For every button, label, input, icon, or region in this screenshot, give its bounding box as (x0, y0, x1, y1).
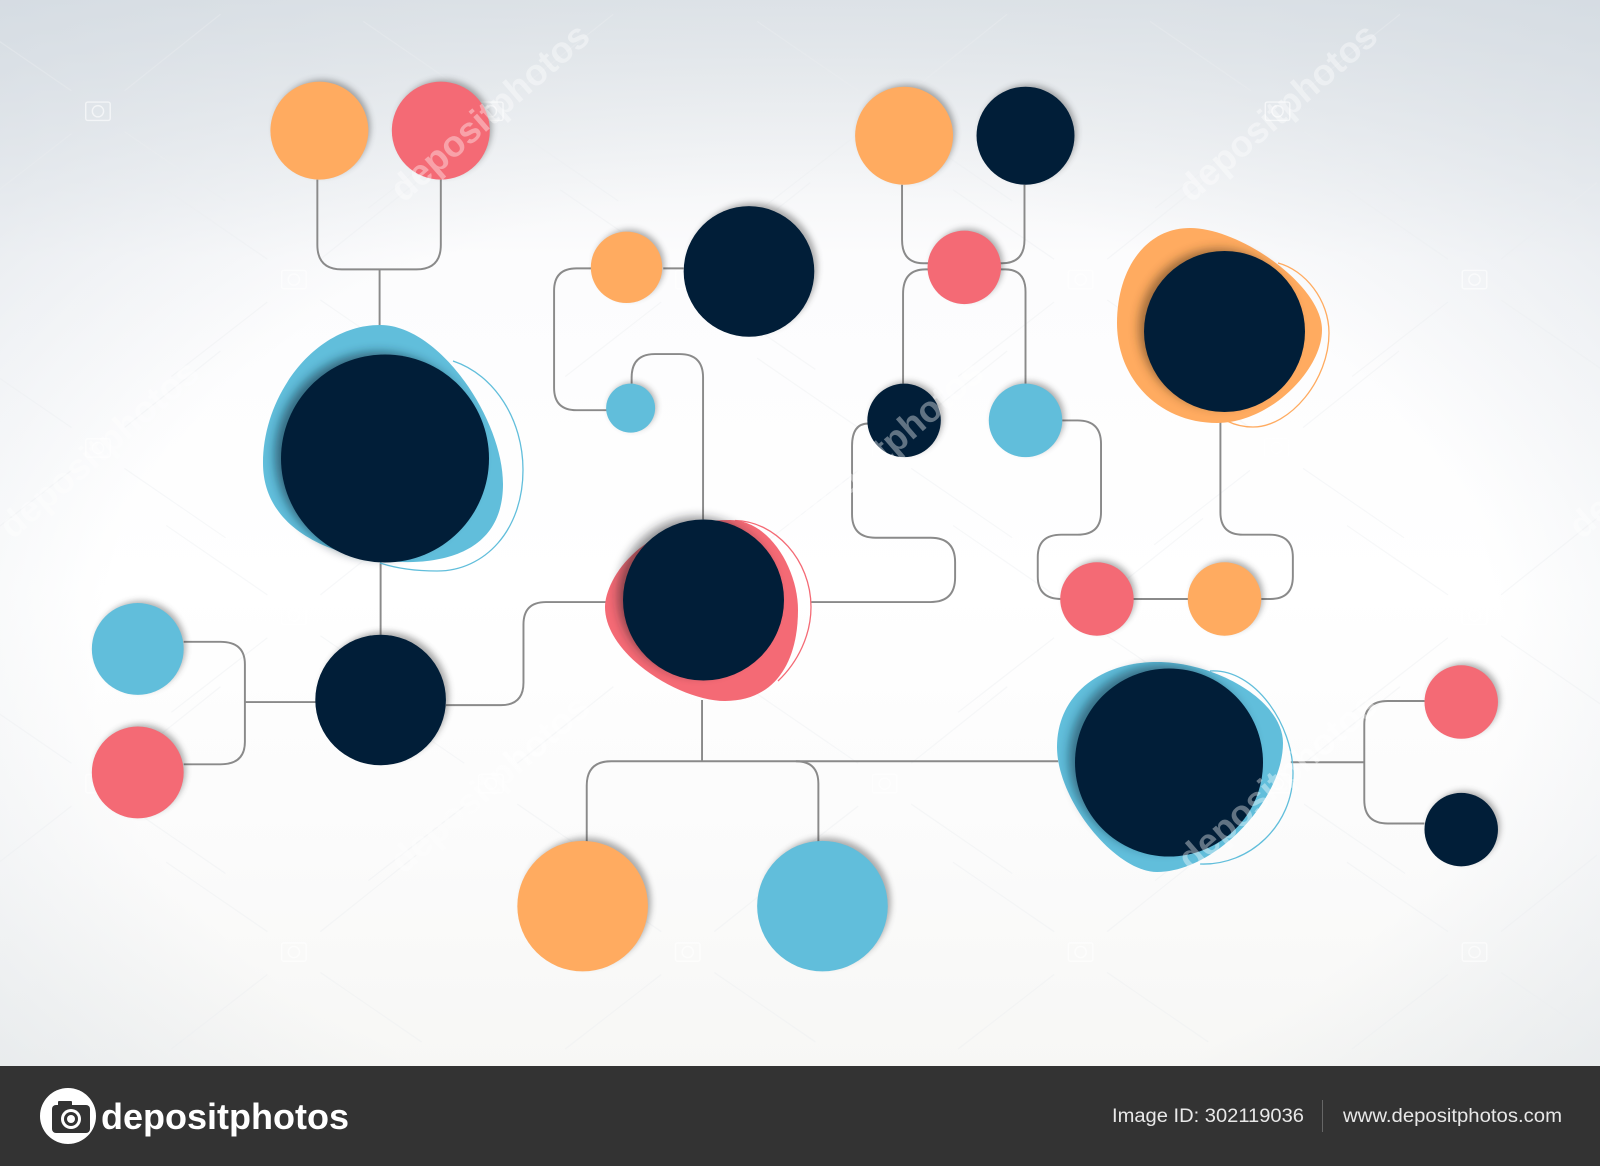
node: red lower right (1060, 560, 1136, 636)
blob node: orange top right (1117, 228, 1329, 427)
watermark text: depositphotos (382, 686, 597, 881)
watermark text (0, 15, 1600, 881)
watermark text: depositphotos (382, 15, 597, 210)
node: small orange (591, 230, 664, 303)
node: navy far right (1424, 791, 1500, 866)
node: navy small middle (867, 382, 943, 457)
node: red top left (392, 80, 492, 180)
footer bar (0, 1066, 1600, 1166)
watermark text: depositphotos (1170, 15, 1385, 210)
watermark text: depositphotos (776, 351, 991, 546)
node: navy left (315, 632, 449, 765)
node: navy top (977, 85, 1077, 185)
node: orange lower right (1188, 560, 1263, 636)
node: orange bottom (517, 838, 651, 971)
node: red far right (1424, 663, 1500, 739)
blob node: blue right (1057, 662, 1293, 872)
footer logo (40, 1088, 349, 1144)
footer logo: depositphotos (101, 1096, 349, 1137)
node: orange top (855, 85, 955, 185)
watermark text: depositphotos (1170, 684, 1385, 879)
node: red left (92, 724, 186, 818)
node: red upper (928, 229, 1003, 304)
blob node: blue left (263, 325, 523, 571)
circle nodes (92, 80, 1500, 971)
node: small blue (606, 383, 656, 433)
node: blue left (92, 601, 186, 695)
footer image id: Image ID: 302119036 (1112, 1106, 1304, 1127)
node: blue small middle (989, 382, 1064, 457)
footer divider (1322, 1100, 1323, 1132)
node: blue bottom (757, 838, 891, 971)
connector lines (184, 180, 1424, 842)
node: navy upper middle (684, 203, 817, 337)
footer site url: www.depositphotos.com (1342, 1106, 1562, 1127)
node: orange top left (270, 80, 370, 180)
blob node: red centre (605, 517, 811, 701)
